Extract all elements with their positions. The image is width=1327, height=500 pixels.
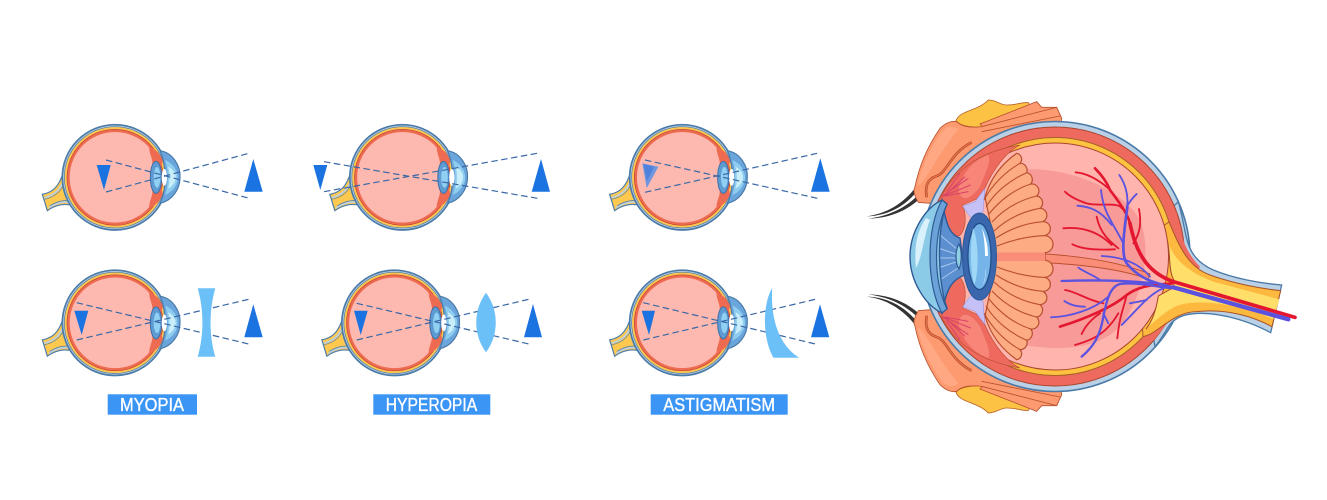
label: hyperopia: HYPEROPIA — [386, 395, 477, 415]
astigmatism corrected eye — [610, 270, 829, 375]
panel: astigmatism — [610, 125, 830, 415]
eyelashes — [867, 189, 922, 324]
astigmatism uncorrected eye — [610, 125, 830, 230]
crystalline lens — [956, 213, 996, 300]
iris — [928, 200, 965, 313]
large eye anatomy cross-section — [867, 100, 1295, 413]
label: astigmatism: ASTIGMATISM — [663, 395, 775, 415]
ciliary fins — [984, 153, 1053, 360]
eyelids and orbital fat — [914, 100, 1062, 413]
panel: hyperopia — [313, 125, 550, 415]
myopia uncorrected eye — [42, 125, 263, 230]
label: myopia: MYOPIA — [120, 395, 184, 415]
hyperopia uncorrected eye — [313, 125, 550, 230]
retinal vessels — [1051, 168, 1295, 357]
myopia corrected eye — [42, 270, 263, 375]
panel: myopia — [42, 125, 263, 415]
vitreous canal — [995, 252, 1150, 279]
optic disc — [1146, 242, 1279, 329]
cornea — [910, 200, 947, 313]
eyeball layers with optic nerve — [920, 122, 1282, 392]
hyperopia corrected eye — [322, 270, 542, 375]
ciliary body and suspensory fibres — [942, 145, 1020, 368]
